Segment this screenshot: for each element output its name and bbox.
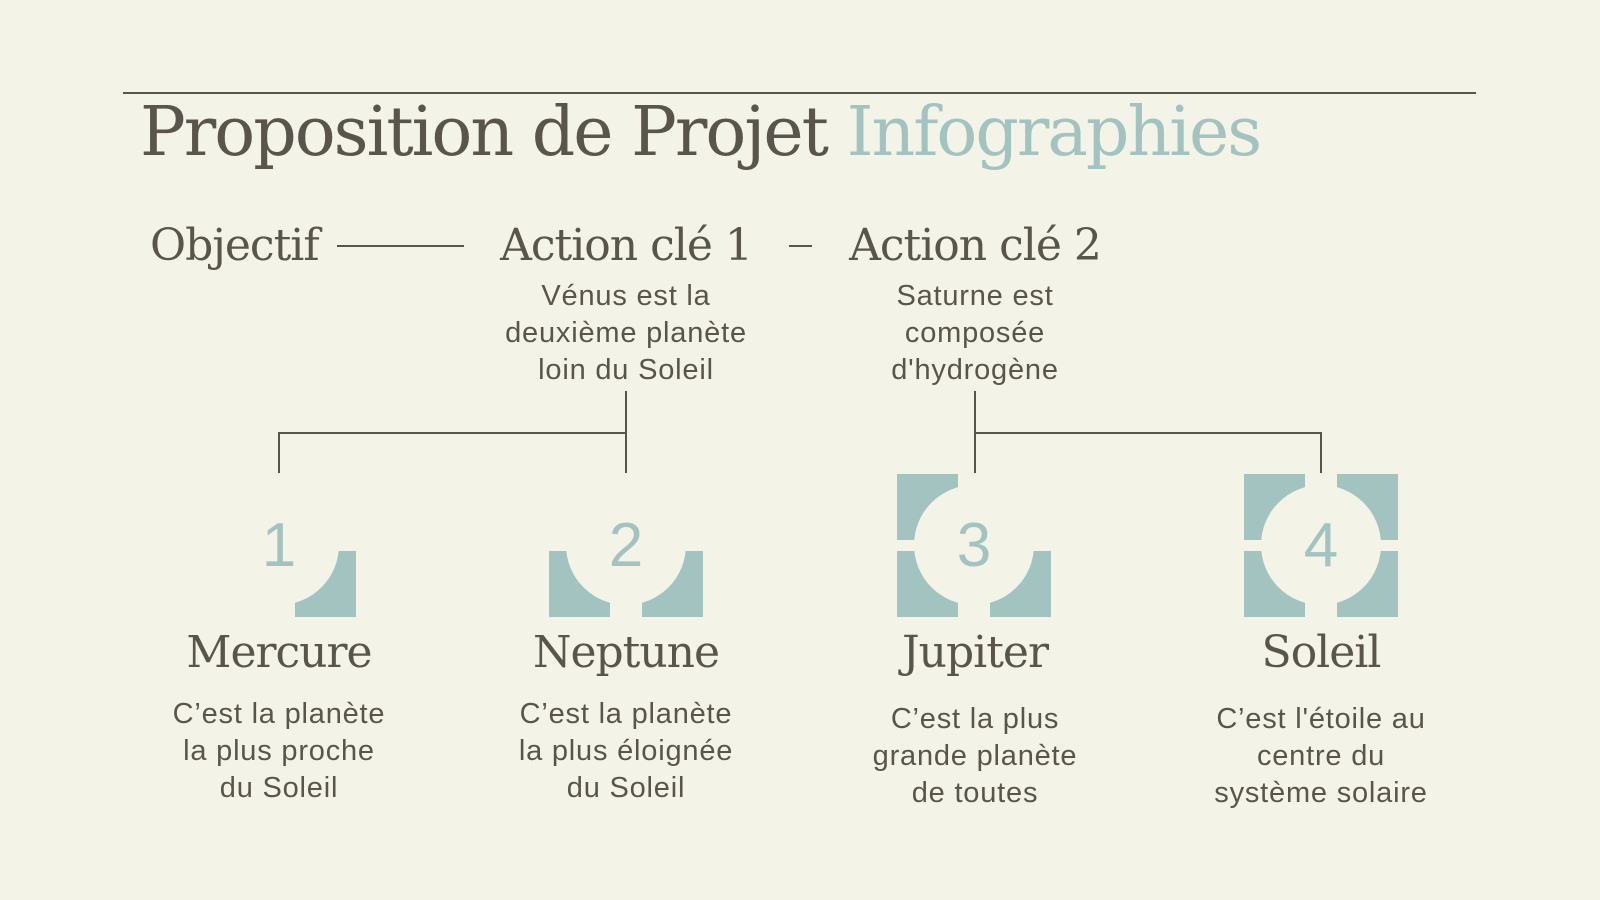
connector line objectif (337, 245, 464, 247)
top rule (123, 92, 1476, 94)
text: Neptune: la plus éloignée (519, 735, 733, 767)
text: Soleil: centre du (1257, 740, 1385, 772)
icon 3: 3 (957, 511, 991, 580)
text: Soleil: C’est l'étoile au (1216, 703, 1426, 735)
title: Proposition de Projet Infographies (140, 93, 1260, 172)
icon 2: 2 (609, 511, 643, 580)
text: action 2: d'hydrogène (891, 354, 1059, 386)
text: action 1 (505, 280, 747, 386)
text: action 1: loin du Soleil (538, 354, 714, 386)
text: Neptune (519, 698, 733, 804)
text: action 2: composée (905, 317, 1045, 349)
icon 1 (262, 511, 356, 617)
heading: Objectif: Objectif (150, 220, 319, 271)
name: Neptune: Neptune (533, 627, 719, 678)
icon 1: 1 (262, 511, 296, 580)
text: action 2: Saturne est (896, 280, 1054, 312)
heading: Action clé 2: Action clé 2 (849, 220, 1101, 271)
text: Mercure: C’est la planète (173, 698, 385, 730)
name: Jupiter: Jupiter (902, 627, 1048, 678)
text: Mercure: du Soleil (220, 772, 338, 804)
name: Soleil: Soleil (1262, 627, 1380, 678)
icon 3 (897, 474, 1051, 617)
heading: Action clé 1: Action clé 1 (500, 220, 752, 271)
text: action 2 (891, 280, 1059, 386)
text: Soleil: système solaire (1214, 777, 1428, 809)
connector dash (789, 245, 812, 247)
icon 4: 4 (1304, 511, 1338, 580)
text: Jupiter: grande planète (873, 740, 1077, 772)
text: Neptune: du Soleil (567, 772, 685, 804)
text: action 1: deuxième planète (505, 317, 747, 349)
text: Jupiter: C’est la plus (891, 703, 1059, 735)
text: action 1: Vénus est la (541, 280, 711, 312)
text: Jupiter (873, 703, 1077, 809)
name: Mercure: Mercure (186, 627, 372, 678)
text: Soleil (1214, 703, 1428, 809)
icon 4 (1244, 474, 1398, 617)
text: Neptune: C’est la planète (520, 698, 732, 730)
text: Mercure (173, 698, 385, 804)
icon 2 (549, 511, 703, 617)
text: Mercure: la plus proche (183, 735, 375, 767)
text: Jupiter: de toutes (912, 777, 1038, 809)
